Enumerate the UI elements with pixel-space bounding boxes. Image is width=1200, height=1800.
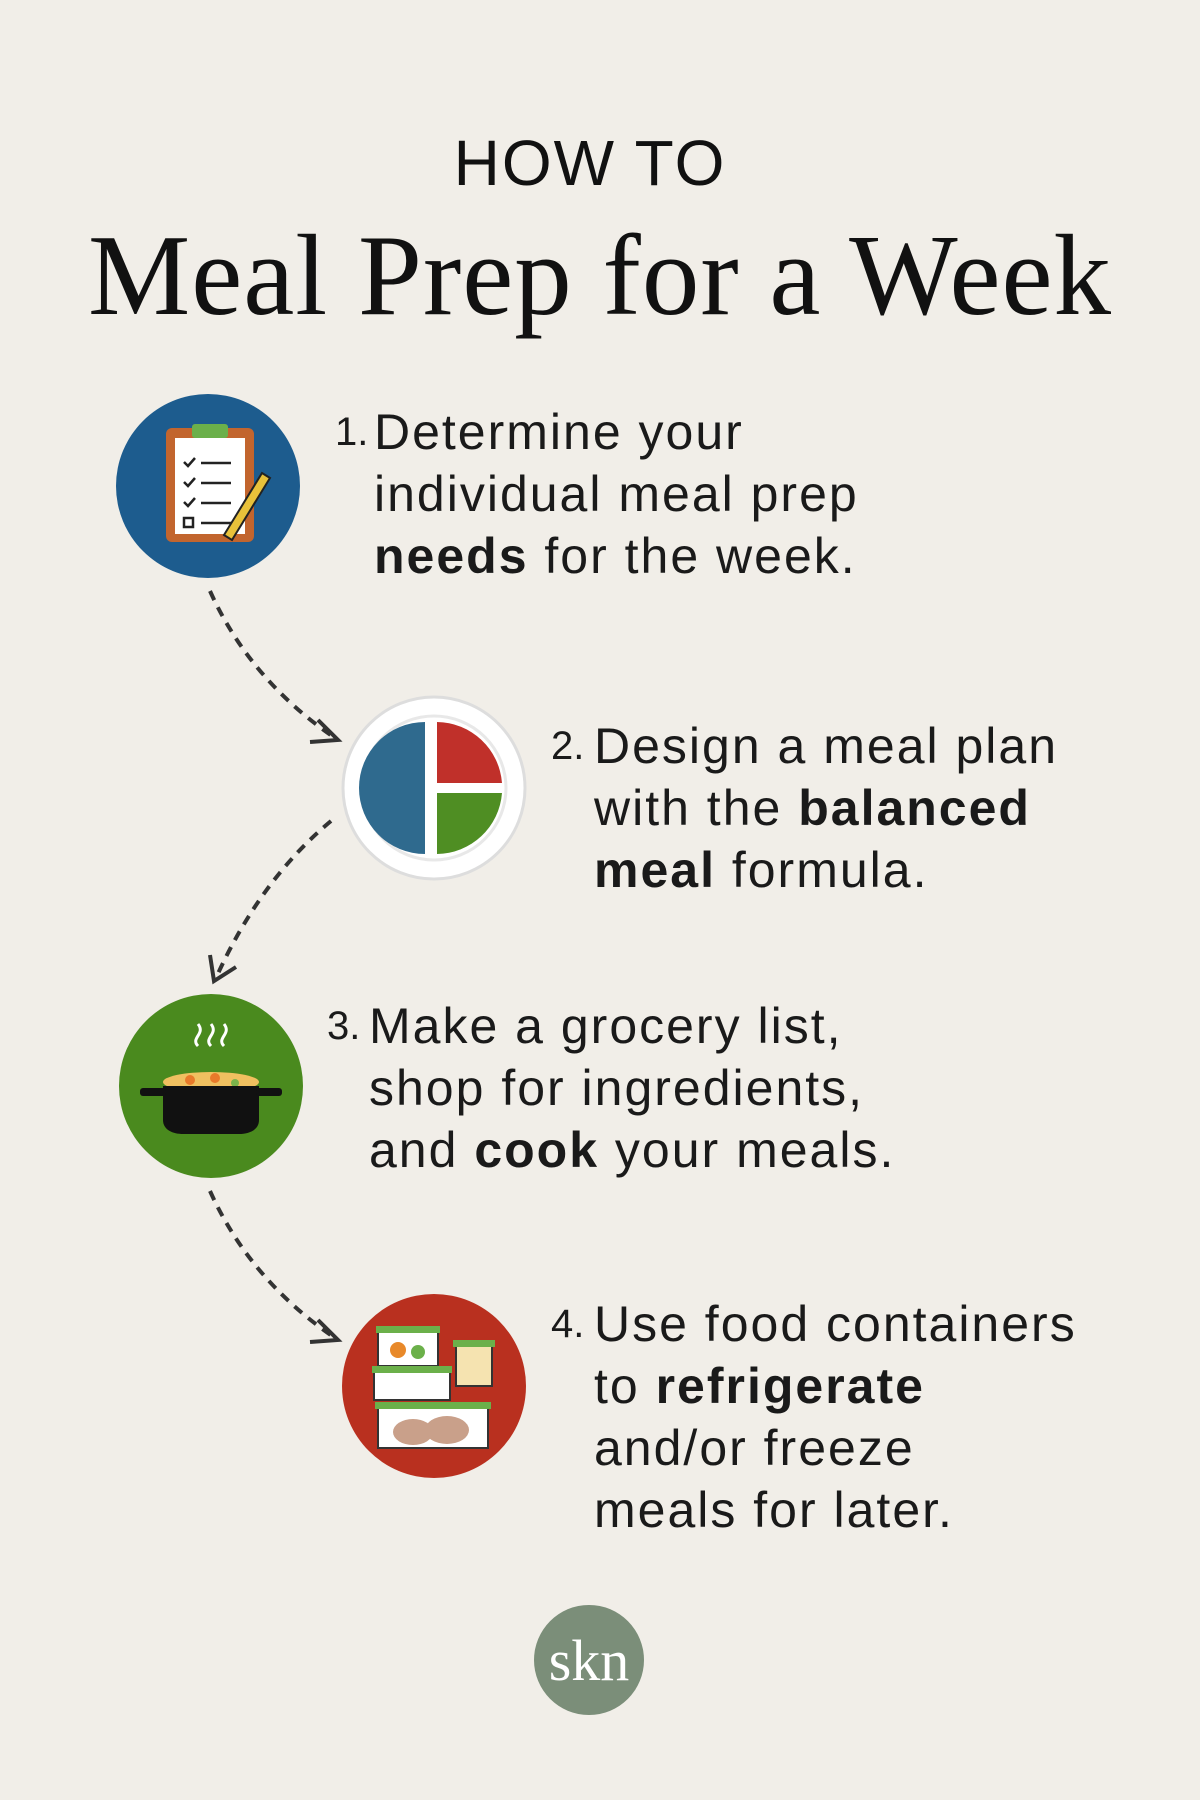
step 4 text: 4.: [551, 1302, 584, 1346]
step 3 text: 3.: [327, 1004, 360, 1048]
arrow 3: [210, 1191, 335, 1338]
step 3 text: Make a grocery list,: [369, 998, 842, 1054]
title: Meal Prep for a Week: [88, 212, 1112, 339]
step 3 text: [327, 998, 895, 1178]
logo: skn: [549, 1628, 629, 1693]
step 2 text: Design a meal plan: [594, 718, 1058, 774]
step 4 text: to refrigerate: [594, 1358, 925, 1414]
step 1 text: needs for the week.: [374, 528, 857, 584]
arrow 1: [210, 591, 335, 738]
icon: clipboard: [116, 394, 300, 578]
step 1 text: 1.: [335, 410, 368, 454]
step 1 text: individual meal prep: [374, 466, 859, 522]
step 4 text: meals for later.: [594, 1482, 954, 1538]
step 2 text: [551, 718, 1058, 898]
heading: how to: HOW TO: [454, 127, 726, 199]
step 4 text: and/or freeze: [594, 1420, 915, 1476]
icon: pot: [119, 994, 303, 1178]
icon: plate: [343, 697, 525, 879]
arrow 2: [216, 821, 331, 978]
step 2 text: with the balanced: [594, 780, 1031, 836]
step 3 text: and cook your meals.: [369, 1122, 895, 1178]
step 1 text: [335, 404, 859, 584]
step 4 text: Use food containers: [594, 1296, 1077, 1352]
step 2 text: meal formula.: [594, 842, 928, 898]
step 1 text: Determine your: [374, 404, 744, 460]
step 4 text: [551, 1296, 1077, 1538]
step 2 text: 2.: [551, 724, 584, 768]
icon: containers: [342, 1294, 526, 1478]
logo: [534, 1605, 644, 1715]
step 3 text: shop for ingredients,: [369, 1060, 864, 1116]
